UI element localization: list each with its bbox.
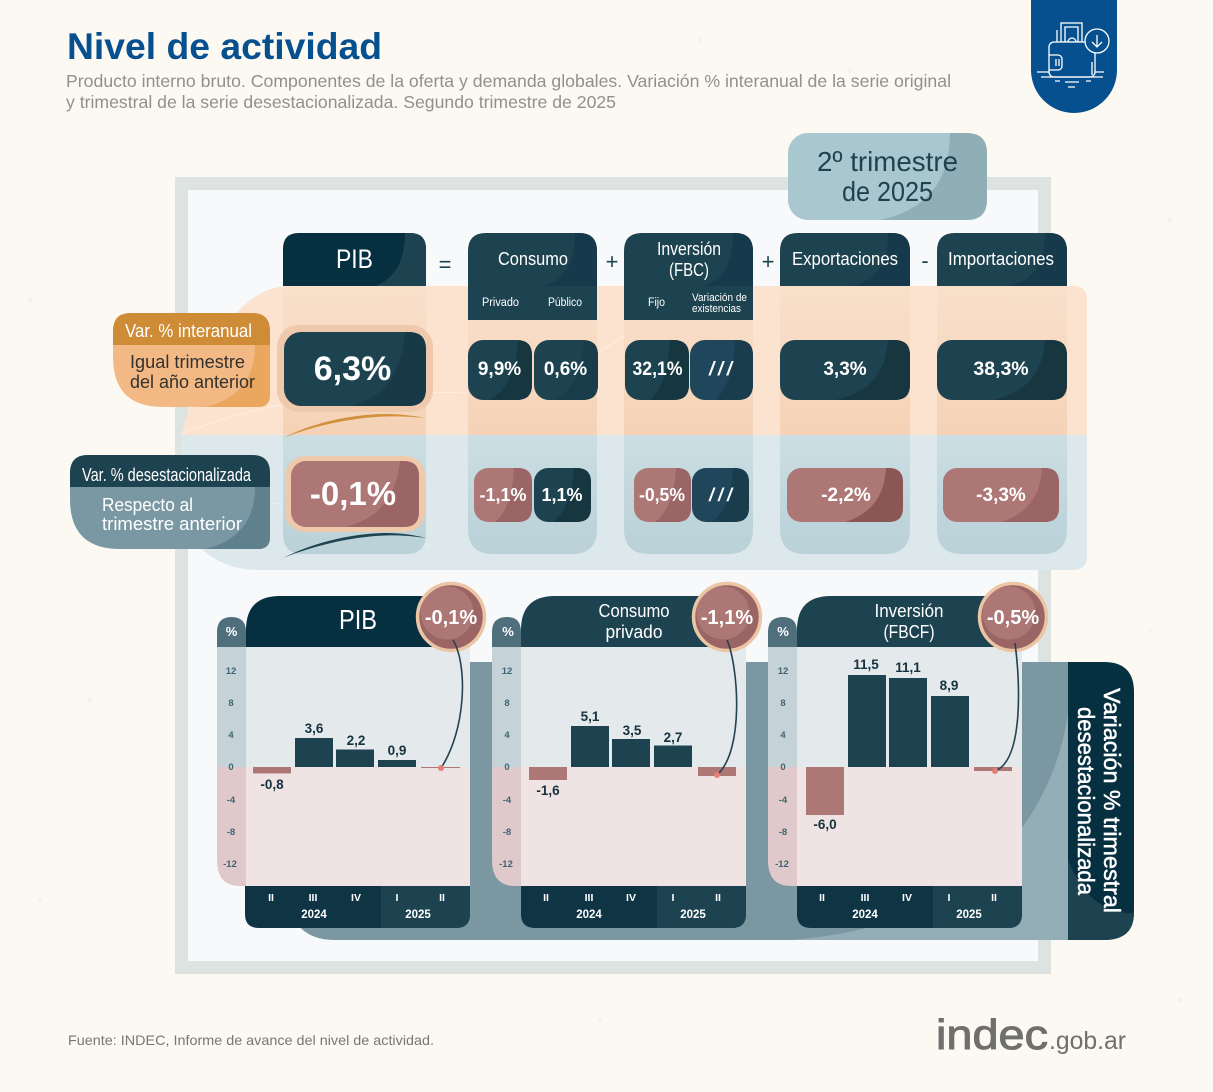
chart: Consumo privado: -12 bbox=[499, 859, 513, 870]
chart: Inversión FBCF: Inversión bbox=[874, 600, 944, 621]
label: Var. % interanual: Igual trimestre bbox=[130, 351, 245, 372]
value: inversión fijo desestacionalizado: -0,5% bbox=[639, 485, 685, 505]
value: importaciones desestacionalizado: -3,3% bbox=[976, 485, 1026, 506]
header: Inversión FBC: (FBC) bbox=[669, 260, 709, 280]
header: Consumo: Privado bbox=[482, 297, 519, 309]
label: Var. % desestacionalizada: Respecto al bbox=[102, 494, 193, 515]
header: Inversión FBC: Inversión bbox=[657, 239, 721, 259]
value: consumo público interanual: 0,6% bbox=[544, 359, 587, 380]
chart: Consumo privado: I bbox=[672, 892, 675, 904]
value: consumo privado interanual: 9,9% bbox=[478, 359, 521, 380]
badge: 2º trimestre de 2025: de 2025 bbox=[842, 176, 933, 207]
chart: Consumo privado: privado bbox=[606, 621, 662, 642]
chart: Inversión FBCF: % bbox=[777, 624, 789, 639]
label: Var. % interanual bbox=[113, 313, 270, 407]
value: consumo público desestacionalizado: 1,1% bbox=[541, 485, 583, 505]
band: variación desestacionalizada bbox=[181, 435, 1087, 570]
columns: orange sections bbox=[283, 286, 1067, 435]
label: Var. % interanual: Var. % interanual bbox=[125, 321, 252, 341]
heading: variación % trimestral desestacionalizada: desestacionalizada bbox=[1073, 707, 1099, 895]
operator: minus: - bbox=[921, 248, 929, 273]
chart: Inversión FBCF: 4 bbox=[780, 730, 786, 741]
value: exportaciones desestacionalizado bbox=[787, 468, 903, 522]
chart: Consumo privado: -8 bbox=[503, 827, 511, 838]
header: Inversión FBC bbox=[624, 233, 753, 320]
label: Var. % desestacionalizada: Var. % desestacionalizada bbox=[82, 465, 252, 485]
band: variación interanual bbox=[181, 286, 1087, 435]
chart: Inversión FBCF: III bbox=[861, 892, 869, 904]
chart: PIB: % bbox=[226, 624, 238, 639]
chart: PIB: -0,1% bbox=[425, 607, 477, 629]
value: consumo privado desestacionalizado: -1,1% bbox=[479, 485, 527, 505]
subtitle: Producto interno bruto. Componentes de la oferta y demanda globales. Variación % interanual de la serie original bbox=[66, 71, 951, 91]
chart: Inversión FBCF: 11,1 bbox=[895, 660, 921, 675]
chart: Inversión FBCF: 2024 bbox=[852, 909, 878, 921]
logo: indec.gob.ar bbox=[936, 1011, 1126, 1058]
chart: PIB: 2024 bbox=[301, 909, 327, 921]
value: consumo público desestacionalizado bbox=[534, 468, 591, 522]
badge: 2º trimestre de 2025 bbox=[788, 133, 987, 220]
chart: Inversión FBCF: -8 bbox=[779, 827, 787, 838]
title: Nivel de actividad bbox=[67, 25, 382, 67]
chart: Inversión FBCF: 2025 bbox=[956, 909, 982, 921]
source note: Fuente: INDEC, Informe de avance del nivel de actividad. bbox=[68, 1032, 434, 1048]
chart: Inversión FBCF: (FBCF) bbox=[884, 621, 934, 642]
columns: blue sections bbox=[283, 435, 1067, 554]
label: Var. % desestacionalizada bbox=[70, 455, 270, 549]
chart: PIB: -0,8 bbox=[260, 777, 284, 792]
chart: Inversión FBCF: -12 bbox=[775, 859, 789, 870]
chart: Inversión FBCF: I bbox=[948, 892, 951, 904]
chart: Consumo privado: Consumo bbox=[598, 600, 670, 621]
value: exportaciones interanual: 3,3% bbox=[823, 359, 867, 380]
header: Consumo: Público bbox=[548, 297, 582, 309]
logo: indec.gob.ar: .gob.ar bbox=[1049, 1027, 1126, 1055]
panel: teal backing for charts bbox=[290, 662, 1068, 940]
chart: Inversión FBCF: 11,5 bbox=[853, 657, 879, 672]
chart: Inversión FBCF: -0,5% bbox=[987, 607, 1039, 629]
value: PIB interanual 6,3%: 6,3% bbox=[314, 350, 391, 388]
label: Var. % interanual: del año anterior bbox=[130, 371, 255, 392]
chart: PIB: 12 bbox=[226, 666, 236, 677]
chart: Consumo privado: IV bbox=[626, 892, 636, 904]
chart: PIB: -4 bbox=[227, 795, 236, 806]
header: Inversión FBC: existencias bbox=[692, 303, 741, 315]
value: consumo privado desestacionalizado bbox=[474, 468, 532, 522]
heading: variación % trimestral desestacionalizada: Variación % trimestral bbox=[1099, 688, 1125, 913]
chart: Consumo privado: 2,7 bbox=[664, 730, 682, 745]
chart: PIB: I bbox=[396, 892, 399, 904]
chart: Inversión FBCF: IV bbox=[902, 892, 912, 904]
value: consumo público interanual bbox=[534, 340, 598, 400]
chart: PIB: 2,2 bbox=[347, 733, 365, 748]
chart: Consumo privado: II bbox=[543, 892, 549, 904]
chart: PIB: 3,6 bbox=[305, 721, 324, 736]
operator: equals: = bbox=[439, 252, 451, 277]
header: Importaciones: Importaciones bbox=[948, 249, 1054, 269]
chart: PIB: PIB bbox=[339, 604, 377, 635]
value: inversión fijo interanual bbox=[625, 340, 689, 400]
value: consumo privado interanual bbox=[468, 340, 532, 400]
value: existencias desestacionalizado bbox=[692, 468, 749, 522]
badge: 2º trimestre de 2025: 2º trimestre bbox=[817, 146, 958, 177]
chart: Consumo privado: % bbox=[502, 624, 514, 639]
chart: Consumo privado: 2025 bbox=[680, 909, 706, 921]
value: inversión fijo desestacionalizado bbox=[634, 468, 691, 522]
chart: Inversión FBCF: 0 bbox=[780, 762, 786, 773]
stroke: orange brush curve bbox=[283, 414, 426, 438]
chart: PIB: 0,9 bbox=[388, 743, 406, 758]
chart: Consumo privado: -4 bbox=[503, 795, 512, 806]
chart: Inversión FBCF: 8 bbox=[780, 698, 786, 709]
header: Importaciones bbox=[937, 233, 1067, 286]
header: PIB: PIB bbox=[336, 244, 373, 274]
value: PIB desestacionalizado -0,1%: -0,1% bbox=[310, 475, 396, 512]
chart: Inversión FBCF: II bbox=[991, 892, 997, 904]
chart: Consumo privado: 12 bbox=[502, 666, 512, 677]
subtitle bbox=[66, 71, 951, 112]
chart: PIB: 2025 bbox=[405, 909, 431, 921]
chart: PIB: 8 bbox=[228, 698, 234, 709]
chart: Inversión FBCF: -6,0 bbox=[813, 817, 837, 832]
header: Consumo: Consumo bbox=[498, 249, 568, 269]
chart: PIB: II bbox=[268, 892, 274, 904]
panel: main frame bbox=[182, 184, 1044, 968]
chart: Consumo privado: II bbox=[715, 892, 721, 904]
chart: PIB: -12 bbox=[223, 859, 237, 870]
chart: Inversión FBCF: -4 bbox=[779, 795, 788, 806]
logo: indec.gob.ar: indec bbox=[936, 1011, 1048, 1058]
value: inversión fijo interanual: 32,1% bbox=[632, 359, 683, 380]
chart: Consumo privado: 0 bbox=[504, 762, 510, 773]
chart: Consumo privado: 3,5 bbox=[623, 723, 642, 738]
chart: Consumo privado: 2024 bbox=[576, 909, 602, 921]
chart: Consumo privado: 5,1 bbox=[581, 709, 600, 724]
header: PIB bbox=[283, 233, 426, 286]
chart: Consumo privado: III bbox=[585, 892, 593, 904]
value: PIB interanual 6,3% bbox=[277, 325, 433, 412]
value: importaciones interanual: 38,3% bbox=[973, 358, 1029, 380]
chart: Consumo privado: -1,6 bbox=[536, 783, 560, 798]
stroke: blue brush curve bbox=[283, 533, 426, 558]
value: existencias desestacionalizado: /// bbox=[708, 485, 734, 505]
heading: variación % trimestral desestacionalizada bbox=[1068, 662, 1134, 940]
value: importaciones desestacionalizado bbox=[943, 468, 1059, 522]
value: variación de existencias interanual bbox=[690, 340, 753, 400]
chart: Inversión FBCF: II bbox=[819, 892, 825, 904]
subtitle: y trimestral de la serie desestacionalizada. Segundo trimestre de 2025 bbox=[66, 92, 616, 112]
header: Exportaciones: Exportaciones bbox=[792, 249, 898, 269]
chart: Consumo privado: 8 bbox=[504, 698, 510, 709]
chart: PIB bbox=[217, 583, 485, 928]
operator: plus: + bbox=[762, 249, 774, 274]
value: PIB desestacionalizado -0,1% bbox=[285, 456, 425, 532]
chart: PIB: IV bbox=[351, 892, 361, 904]
chart: Consumo privado bbox=[492, 583, 761, 928]
label: Var. % desestacionalizada: trimestre anterior bbox=[102, 513, 242, 534]
value: importaciones interanual bbox=[937, 340, 1067, 400]
chart: PIB: -8 bbox=[227, 827, 235, 838]
header: Exportaciones bbox=[780, 233, 910, 286]
operator: plus: + bbox=[606, 249, 618, 274]
header: Inversión FBC: Fijo bbox=[648, 297, 665, 309]
chart: Inversión FBCF: 12 bbox=[778, 666, 788, 677]
chart: PIB: 0 bbox=[228, 762, 234, 773]
value: variación de existencias interanual: /// bbox=[708, 359, 734, 380]
header: Consumo bbox=[468, 233, 597, 320]
chart: PIB: III bbox=[309, 892, 317, 904]
chart: Inversión FBCF bbox=[768, 583, 1047, 928]
icon: wallet with money bbox=[1031, 0, 1117, 113]
chart: PIB: II bbox=[439, 892, 445, 904]
chart: PIB: 4 bbox=[228, 730, 234, 741]
chart: Consumo privado: -1,1% bbox=[701, 607, 753, 629]
value: exportaciones desestacionalizado: -2,2% bbox=[821, 485, 871, 506]
chart: Consumo privado: 4 bbox=[504, 730, 510, 741]
chart: Inversión FBCF: 8,9 bbox=[940, 678, 958, 693]
header: Inversión FBC: Variación de bbox=[692, 292, 747, 304]
value: exportaciones interanual bbox=[780, 340, 910, 400]
